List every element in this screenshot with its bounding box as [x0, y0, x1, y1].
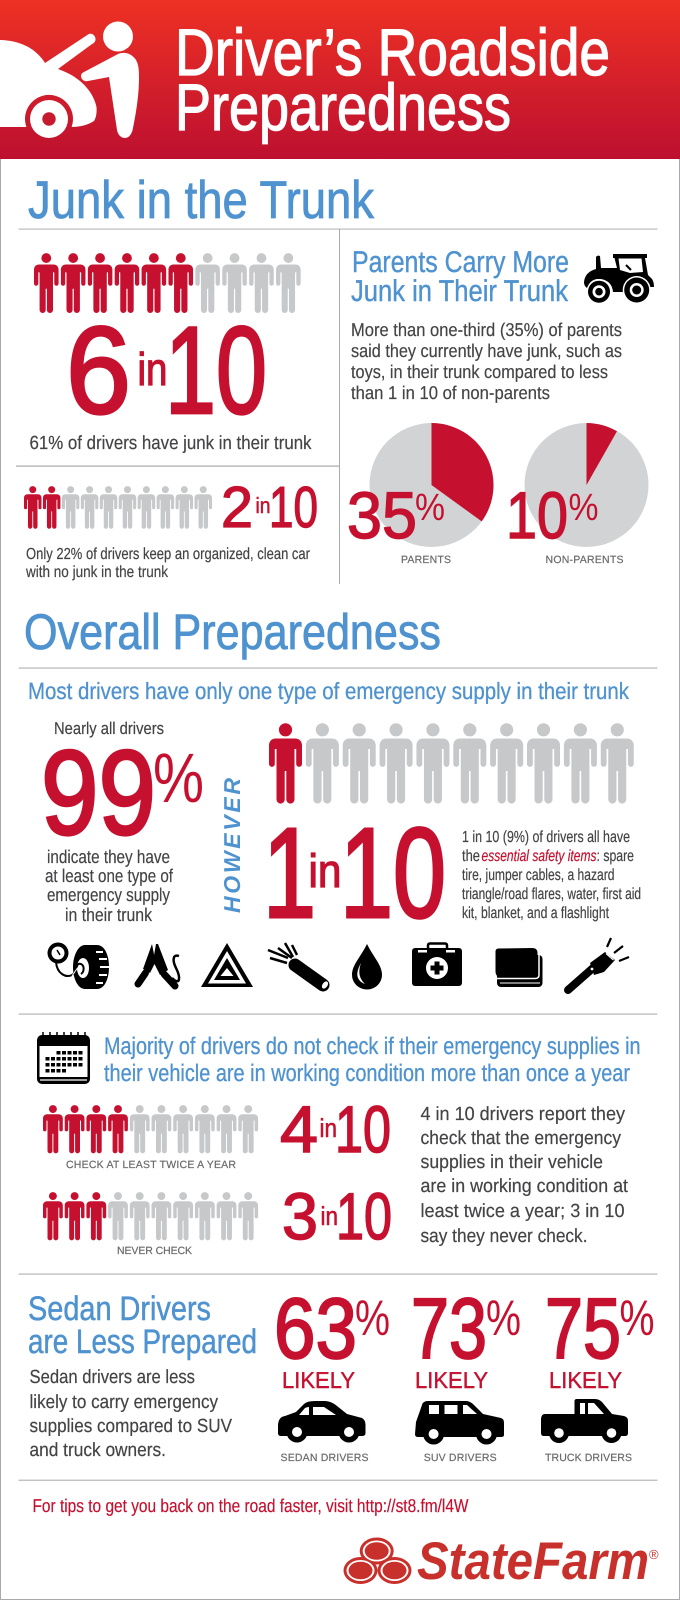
label: check at least twice a year: CHECK AT LEAST TWICE A YEAR [66, 1159, 236, 1171]
stat: 1 in 10: 1 [263, 802, 316, 945]
icon: pickup truck [541, 1399, 628, 1443]
pictogram: 3 of 10 never check [43, 1192, 258, 1240]
text: essential safety items: tire, jumper cables, a hazard [462, 867, 614, 884]
stat: 6 in 10 [66, 302, 267, 440]
stat: 4 in 10 [280, 1092, 391, 1166]
stat: sedan 63% likely: 63 [274, 1281, 357, 1377]
text: parents paragraph: said they currently have junk, such as [351, 340, 622, 361]
text: checking paragraph: check that the emergency [420, 1128, 621, 1149]
heading: parents carry more junk [351, 246, 569, 308]
text: only 22%: Only 22% of drivers keep an organized, clean car [26, 546, 311, 563]
stat: truck 75% likely: LIKELY [549, 1367, 622, 1393]
heading: majority of drivers [104, 1033, 640, 1087]
panel: overall preparedness [18, 604, 658, 990]
stat: 2 in 10: 10 [269, 475, 318, 540]
icon: blanket [496, 948, 542, 987]
title: Preparedness [175, 70, 511, 144]
panel: sedan drivers [28, 1281, 654, 1464]
text: sedan paragraph: Sedan drivers are less [30, 1367, 195, 1388]
stat: 2 in 10 [221, 475, 318, 540]
pie chart: non-parents 10% [506, 423, 648, 566]
text: parents paragraph: toys, in their trunk compared to less [351, 361, 608, 382]
text: only 22% [25, 546, 311, 581]
pie chart: non-parents 10%: % [568, 487, 598, 529]
heading: sedan drivers are less prepared: are Less Prepared [28, 1323, 257, 1361]
text: nearly all drivers: Nearly all drivers [54, 719, 164, 738]
label: sedan drivers: SEDAN DRIVERS [280, 1452, 368, 1464]
stat: 4 in 10: 10 [335, 1092, 391, 1166]
heading: sedan drivers are less prepared: Sedan Drivers [28, 1290, 211, 1328]
text: checking paragraph: supplies in their vehicle [420, 1152, 603, 1173]
text: at least one type: in their trunk [65, 904, 153, 925]
text: parents paragraph: More than one-third (35%) of parents [351, 319, 622, 340]
text: checking paragraph: 4 in 10 drivers report they [420, 1104, 625, 1125]
stat: suv 73% likely: LIKELY [415, 1367, 488, 1393]
text: checking paragraph [420, 1104, 629, 1247]
stat: 4 in 10: 4 [280, 1092, 318, 1166]
text: sedan paragraph: and truck owners. [30, 1440, 166, 1461]
stat: sedan 63% likely: LIKELY [282, 1367, 355, 1393]
icon: first aid kit [412, 944, 462, 986]
text: parents paragraph: than 1 in 10 of non-parents [351, 382, 550, 403]
stat: 1 in 10: 10 [340, 802, 446, 945]
stat: sedan 63% likely: % [355, 1290, 390, 1346]
stat: 2 in 10: 2 [221, 475, 253, 540]
icon: water drop [352, 944, 382, 990]
text: at least one type: at least one type of [45, 865, 174, 886]
text: 61% of drivers: 61% of drivers have junk in their trunk [30, 433, 312, 454]
logo: State Farm: StateFarm [417, 1532, 649, 1591]
text: at least one type: emergency supply [47, 884, 171, 905]
text: at least one type: indicate they have [47, 846, 170, 867]
text: essential safety items: : spare [596, 848, 634, 865]
stat: 6 in 10: 10 [165, 302, 267, 440]
stat: 6 in 10: 6 [66, 302, 131, 440]
text: tips link: For tips to get you back on the road faster, visit http://st8.fm/l4W [32, 1495, 469, 1516]
stat: 3 in 10: 3 [282, 1179, 318, 1253]
panel: junk in the trunk [16, 171, 658, 584]
pie chart: parents 35%: 35 [347, 478, 417, 552]
icon: jumper cable clamp [138, 944, 179, 986]
stat: truck 75% likely: % [620, 1290, 654, 1346]
stat: 6 in 10: in [138, 343, 168, 395]
label: never check: NEVER CHECK [117, 1245, 192, 1257]
icon: tractor [584, 254, 654, 304]
text: sedan paragraph: supplies compared to SUV [30, 1416, 232, 1437]
text: sedan paragraph [30, 1367, 232, 1461]
icon: suv [415, 1401, 504, 1444]
heading: parents carry more junk: Junk in Their Trunk [351, 275, 569, 308]
text: checking paragraph: say they never check. [420, 1226, 588, 1247]
pie chart: parents 35%: % [415, 487, 445, 529]
icon: calendar [37, 1032, 90, 1084]
stat: 1 in 10: in [308, 844, 342, 897]
text: essential safety items: kit, blanket, and a flashlight [462, 905, 609, 922]
pie chart: non-parents 10%: NON-PARENTS [546, 554, 624, 566]
text: parents paragraph [351, 319, 622, 403]
stat: 3 in 10: 10 [336, 1179, 392, 1253]
stat: 1 in 10 [263, 802, 446, 945]
stat: 2 in 10: in [256, 493, 270, 518]
icon: driver looking under car hood [0, 22, 139, 138]
label: suv drivers: SUV DRIVERS [424, 1452, 497, 1464]
icon: road flare [268, 943, 329, 990]
stat: truck 75% likely: 75 [545, 1281, 621, 1377]
pictogram: 4 of 10 check [43, 1105, 258, 1153]
header banner [0, 0, 680, 159]
pie chart: parents 35%: PARENTS [401, 554, 451, 566]
heading: parents carry more junk: Parents Carry More [352, 246, 569, 279]
icon: flashlight [568, 938, 629, 990]
icon: hazard triangle [201, 943, 253, 987]
text: essential safety items: essential safety items [482, 848, 596, 865]
text: checking paragraph: least twice a year; 3 in 10 [420, 1201, 624, 1222]
text: at least one type [45, 846, 174, 925]
label: truck drivers: TRUCK DRIVERS [545, 1452, 632, 1464]
panel: checking supplies [37, 1032, 640, 1257]
pictogram: 2 of 10 drivers [24, 486, 212, 529]
pie chart: non-parents 10%: 10 [506, 478, 568, 552]
heading: junk in the trunk: Junk in the Trunk [28, 171, 374, 230]
pie chart: parents 35% [347, 423, 494, 566]
title [175, 15, 610, 144]
text: checking paragraph: are in working condition at [420, 1176, 629, 1197]
text: essential safety items [462, 829, 641, 922]
heading: sedan drivers are less prepared [28, 1290, 257, 1361]
stat: 99%: 99 [41, 726, 156, 860]
stat: suv 73% likely: % [486, 1290, 521, 1346]
icon: tire and gauge [48, 942, 109, 989]
logo: State Farm: ® [649, 1547, 659, 1562]
stat: 99%: % [153, 739, 204, 817]
pictogram: 1 of 10 drivers [269, 723, 634, 804]
stat: suv 73% likely: 73 [411, 1281, 487, 1377]
label: however: HOWEVER [219, 778, 245, 913]
text: essential safety items: the [462, 848, 480, 865]
text: sedan paragraph: likely to carry emergency [30, 1392, 218, 1413]
stat: 4 in 10: in [320, 1113, 337, 1143]
icon: sedan [278, 1401, 366, 1442]
stat: 3 in 10 [282, 1179, 392, 1253]
text: only 22%: with no junk in the trunk [25, 564, 169, 581]
text: essential safety items: 1 in 10 (9%) of drivers all have [462, 829, 630, 846]
stat: 3 in 10: in [320, 1201, 338, 1231]
heading: overall preparedness: Overall Preparedness [24, 604, 441, 660]
pictogram: 6 of 10 drivers [34, 253, 301, 313]
